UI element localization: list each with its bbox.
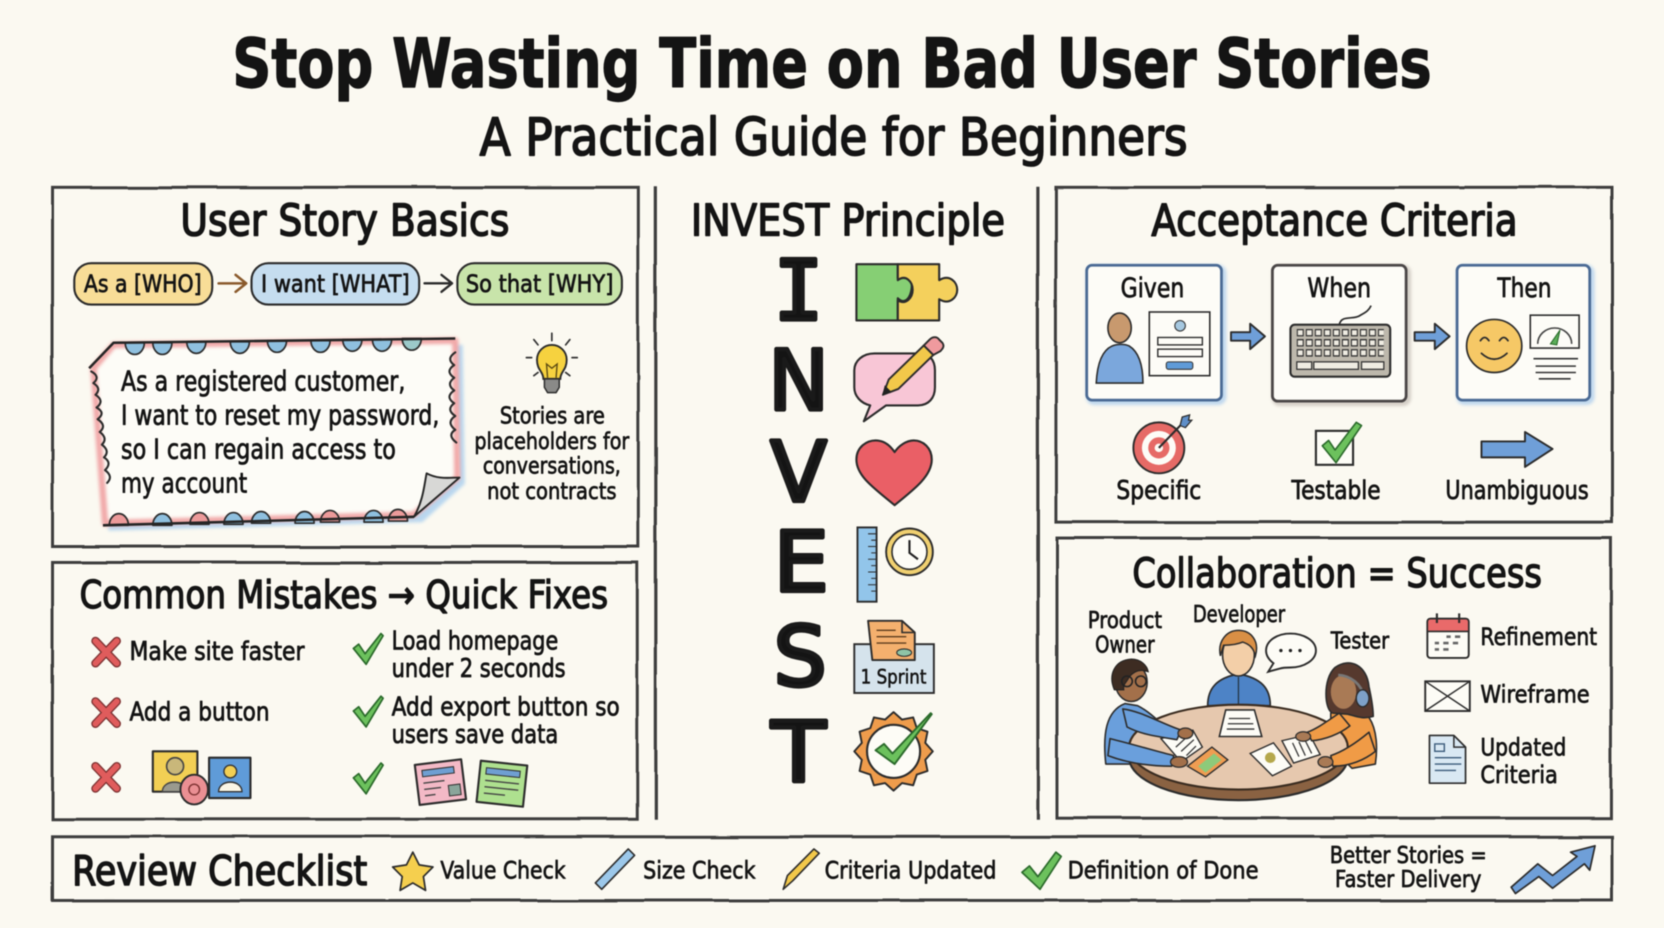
pill: who: As a [WHO]: [84, 269, 202, 298]
fix: load homepage: [353, 626, 566, 684]
mistake: add a button: Add a button: [129, 698, 270, 728]
panel: common mistakes: [53, 562, 637, 819]
arms: product owner: [1108, 709, 1193, 767]
pill: what: [252, 263, 419, 305]
letter T: T: [770, 704, 826, 801]
item: wireframe: Wireframe: [1480, 680, 1590, 709]
panel: acceptance criteria: [1056, 187, 1612, 522]
pill: who: [74, 263, 212, 305]
card: then: Then: [1497, 273, 1552, 304]
item: value check: [393, 852, 566, 890]
heading: review checklist: Review Checklist: [72, 847, 367, 895]
item: size check: [595, 849, 756, 889]
item: size check: Size Check: [643, 856, 756, 885]
item: updated criteria: Criteria: [1480, 760, 1558, 789]
item: refinement: [1427, 613, 1597, 658]
item: criteria updated: [783, 849, 996, 889]
arms: tester: [1296, 713, 1375, 767]
fix: add export button: [353, 692, 620, 750]
arrow: given to when: [1231, 324, 1265, 349]
panel: collaboration: [1057, 538, 1611, 818]
center column: invest principle: [656, 187, 1038, 819]
story note card: [89, 339, 465, 531]
label: product owner: [1088, 606, 1162, 659]
item: definition of done: [1022, 852, 1259, 889]
label: product owner: Product: [1088, 606, 1162, 634]
criterion: specific: Specific: [1116, 476, 1201, 506]
heading: user story basics: User Story Basics: [180, 197, 509, 247]
letter E: E: [774, 514, 829, 611]
item: updated criteria: [1429, 733, 1566, 789]
pill: what: I want [WHAT]: [261, 269, 410, 298]
item: definition of done: Definition of Done: [1068, 856, 1259, 885]
criterion: testable: Testable: [1291, 476, 1381, 506]
arrow: who to what: [219, 275, 246, 292]
table with papers: [1129, 705, 1348, 800]
card: when: When: [1307, 273, 1371, 304]
item: value check: Value Check: [440, 856, 566, 885]
fix: add export button: users save data: [392, 720, 558, 750]
criterion: unambiguous: [1445, 432, 1589, 506]
arrow: when to then: [1415, 324, 1450, 349]
icon: rising arrow: [1511, 846, 1595, 894]
takeaway text: Faster Delivery: [1335, 865, 1482, 893]
tip text: Stories are: [500, 401, 605, 429]
card: given: [1087, 265, 1224, 402]
pill: why: [457, 263, 622, 305]
pill: why: So that [WHY]: [466, 269, 613, 298]
card: when: [1272, 265, 1408, 403]
letter S: S: [774, 609, 827, 706]
subtitle: A Practical Guide for Beginners: [480, 108, 1188, 168]
icon: sprint doc: [854, 621, 934, 693]
panel: user story basics: [53, 187, 638, 547]
criterion: specific: [1116, 415, 1201, 506]
page curl: [414, 473, 460, 517]
criterion: unambiguous: Unambiguous: [1445, 476, 1589, 506]
card: then: [1457, 265, 1592, 402]
heading: acceptance criteria: Acceptance Criteria: [1151, 197, 1518, 247]
story text: my account: [121, 466, 247, 499]
icon: heart: [856, 440, 932, 505]
icon: speech bubble with pencil: [854, 337, 943, 421]
story text: so I can regain access to: [121, 432, 396, 465]
arrow: what to why: [424, 275, 452, 292]
icon: gear badge with check: [854, 712, 933, 791]
criterion: testable: [1291, 422, 1381, 506]
item: wireframe: [1425, 680, 1590, 711]
icon: ruler and clock: [857, 527, 933, 602]
tip text: conversations,: [483, 451, 621, 479]
takeaway text: [1330, 841, 1487, 893]
mistake: icon only: [96, 751, 250, 804]
heading: common mistakes: Common Mistakes → Quick Fixes: [80, 574, 608, 618]
letter V: V: [770, 424, 827, 521]
icon: sprint doc: 1 Sprint: [861, 665, 927, 688]
tip text: [474, 401, 630, 505]
person: product owner: [1105, 659, 1169, 764]
speech bubble: [1266, 634, 1316, 672]
fix: load homepage: Load homepage: [392, 626, 558, 656]
story text: I want to reset my password,: [121, 398, 439, 431]
fix: load homepage: under 2 seconds: [392, 654, 566, 684]
mistake: make site faster: Make site faster: [129, 637, 305, 667]
tip text: placeholders for: [474, 427, 630, 455]
story text: As a registered customer,: [121, 365, 405, 398]
letter N: N: [768, 333, 829, 430]
fix: add export button: Add export button so: [392, 692, 620, 722]
icon: puzzle: [856, 264, 957, 320]
person: tester: [1326, 663, 1377, 768]
takeaway text: Better Stories =: [1330, 841, 1487, 869]
label: tester: Tester: [1330, 626, 1389, 654]
fix: documents: [353, 759, 527, 807]
label: developer: Developer: [1193, 600, 1285, 628]
item: refinement: Refinement: [1480, 622, 1597, 651]
heading: invest principle: INVEST Principle: [691, 197, 1005, 247]
tip text: not contracts: [487, 477, 617, 505]
person: developer: [1208, 630, 1270, 706]
icon: lightbulb: [526, 333, 577, 393]
story text: [121, 365, 439, 499]
panel: review checklist: [53, 837, 1612, 900]
label: product owner: Owner: [1095, 631, 1155, 659]
heading: collaboration: Collaboration = Success: [1132, 550, 1542, 597]
formula pills: [74, 263, 622, 305]
item: criteria updated: Criteria Updated: [825, 856, 996, 885]
letter I: I: [774, 242, 824, 339]
item: updated criteria: Updated: [1480, 733, 1566, 762]
card: given: Given: [1121, 273, 1184, 304]
